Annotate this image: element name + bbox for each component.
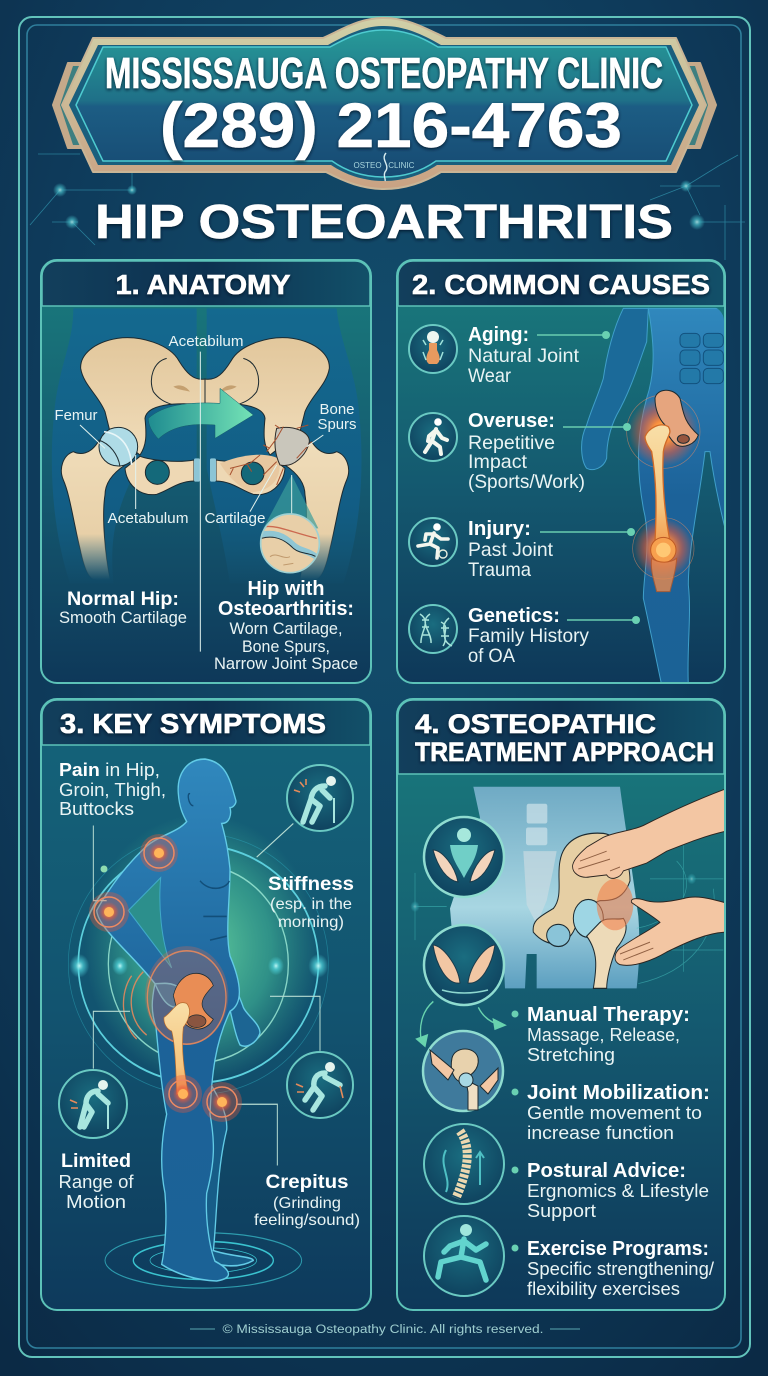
osteoarthritis hip caption: Hip with	[248, 578, 324, 600]
cause: aging	[409, 324, 610, 387]
hip glow	[123, 946, 228, 1094]
cause: overuse	[409, 410, 631, 493]
anatomy labels: Spurs	[318, 416, 356, 433]
concentric rings and glow	[68, 814, 328, 1094]
icon: spine posture	[424, 1124, 504, 1204]
symptom: crepitus: Crepitus	[266, 1172, 348, 1193]
icon: limited motion, person with cane	[59, 1070, 127, 1138]
genetics leader	[567, 616, 640, 624]
background network nodes	[30, 154, 745, 260]
symptoms header bar	[42, 700, 370, 745]
anatomy labels: Acetabilum	[168, 333, 244, 350]
title: HIP OSTEOARTHRITIS	[95, 196, 673, 249]
banner	[53, 18, 716, 189]
treatment: postural advice: Ergnomics & Lifestyle	[527, 1181, 709, 1201]
icon: walking person	[409, 413, 457, 461]
osteoarthritis hip caption: Bone Spurs,	[242, 637, 330, 656]
icon: stiffness, stooped person	[287, 765, 353, 831]
lower hand	[615, 897, 725, 965]
icon: hands on body	[424, 817, 504, 897]
osteoarthritis hip caption: Narrow Joint Space	[214, 654, 358, 673]
cause: genetics: Family History	[468, 625, 589, 647]
symptom: crepitus: (Grinding	[273, 1195, 341, 1212]
symptom: pain: Buttocks	[59, 799, 134, 819]
symptom: stiffness: (esp. in the	[270, 896, 352, 913]
body illustration	[68, 759, 328, 1288]
treatment heading: 4. OSTEOPATHIC	[415, 709, 656, 739]
treatment header bar	[398, 700, 724, 774]
cause: overuse: Overuse:	[468, 410, 555, 432]
normal hip caption: Smooth Cartilage	[59, 608, 187, 627]
treatment heading	[415, 709, 714, 767]
symptom: limited range of motion: Limited	[61, 1151, 131, 1172]
anatomy header bar	[42, 261, 370, 306]
aging leader	[537, 331, 610, 339]
icon: two hands	[424, 925, 504, 1005]
treatment: manual therapy: Massage, Release,	[527, 1025, 680, 1045]
human figure	[97, 759, 260, 1281]
symptom: crepitus	[254, 1172, 360, 1229]
treatment: exercise programs: flexibility exercises	[527, 1279, 680, 1299]
banner small logo	[354, 153, 415, 181]
cause: injury: Past Joint	[468, 539, 554, 561]
treatment: joint mobilization: increase function	[527, 1123, 674, 1143]
anatomy labels: Acetabulum	[108, 510, 188, 527]
treatment: joint mobilization	[512, 1082, 710, 1143]
treatment: joint mobilization: Joint Mobilization:	[527, 1082, 710, 1104]
leader lines	[80, 352, 323, 652]
spine	[523, 804, 557, 924]
icon: exercise	[424, 1216, 504, 1296]
leader lines	[93, 824, 320, 1166]
symptom: pain: Pain in Hip,	[59, 760, 160, 780]
panel: anatomy	[41, 260, 371, 683]
joint glows	[89, 834, 242, 1122]
manual therapy illustration	[410, 787, 725, 1046]
treatment heading: TREATMENT APPROACH	[415, 737, 714, 767]
osteoarthritis hip caption: Osteoarthritis:	[218, 598, 354, 620]
normal hip caption: Normal Hip:	[67, 589, 179, 610]
cause: overuse: Impact	[468, 451, 528, 473]
symptom: stiffness	[268, 874, 354, 931]
treatment: manual therapy: Stretching	[527, 1045, 615, 1065]
cause: aging: Wear	[468, 365, 511, 387]
upper hand	[573, 789, 725, 878]
treatment: joint mobilization: Gentle movement to	[527, 1103, 702, 1123]
panel: key symptoms	[41, 699, 371, 1310]
cause: injury: Trauma	[468, 559, 531, 581]
gap between arm and torso	[128, 878, 172, 968]
symptoms heading: 3. KEY SYMPTOMS	[60, 708, 326, 739]
magnified cartilage inset	[260, 475, 320, 573]
causes header bar	[398, 261, 724, 306]
symptom: stiffness: morning)	[278, 914, 344, 931]
symptom: crepitus: feeling/sound)	[254, 1212, 360, 1229]
anatomy labels	[54, 333, 356, 527]
arrow	[148, 388, 253, 439]
symptom: stiffness: Stiffness	[268, 874, 354, 895]
anatomy heading: 1. ANATOMY	[116, 269, 291, 300]
floor rings	[105, 1233, 302, 1288]
symptom: limited range of motion	[58, 1151, 135, 1212]
treatment: postural advice: Postural Advice:	[527, 1160, 686, 1182]
overuse leader	[563, 423, 631, 431]
pelvis and femur	[533, 833, 630, 988]
anatomy labels: Femur	[54, 407, 98, 424]
treatment: exercise programs	[512, 1238, 714, 1299]
normal femoral head	[98, 427, 138, 467]
cause: genetics: of OA	[468, 645, 515, 667]
grid accents	[410, 845, 723, 984]
cause: genetics	[409, 605, 640, 667]
leg anatomy illustration	[582, 308, 728, 685]
banner frame	[53, 18, 716, 189]
treatment: postural advice	[512, 1160, 709, 1221]
body background	[450, 787, 639, 988]
cause: aging: Aging:	[468, 324, 529, 346]
treatment: exercise programs: Specific strengthening/	[527, 1259, 714, 1279]
osteoarthritis hip caption: Worn Cartilage,	[230, 619, 342, 638]
osteoarthritis hip caption	[214, 578, 358, 673]
hip illustration	[52, 308, 361, 652]
treatment: manual therapy: Manual Therapy:	[527, 1004, 690, 1026]
cause: overuse: (Sports/Work)	[468, 471, 585, 493]
anatomy labels: Bone	[320, 401, 354, 418]
symptom: limited range of motion: Motion	[66, 1192, 126, 1212]
panel: common causes	[397, 260, 728, 685]
footer: © Mississauga Osteopathy Clinic. All rights reserved.	[222, 1324, 544, 1336]
icon: crepitus, limping person	[287, 1052, 353, 1118]
symptom: pain: Groin, Thigh,	[59, 780, 166, 800]
cause: aging: Natural Joint	[468, 345, 580, 367]
symptom: limited range of motion: Range of	[58, 1172, 135, 1192]
cause: injury	[409, 518, 635, 581]
icon: aging joint	[409, 325, 457, 373]
treatment: postural advice: Support	[527, 1201, 596, 1221]
normal hip caption	[59, 589, 187, 627]
banner small logo: OSTEO CLINIC	[354, 161, 415, 170]
panel: osteopathic treatment approach	[397, 699, 725, 1310]
anatomy labels: Cartilage	[204, 510, 266, 527]
cause: overuse: Repetitive	[468, 432, 555, 454]
banner phone number: (289) 216-4763	[160, 91, 622, 161]
cause: injury: Injury:	[468, 518, 531, 540]
curved arrows	[417, 1001, 505, 1046]
causes heading: 2. COMMON CAUSES	[412, 269, 710, 300]
icon: running person	[409, 518, 457, 566]
symptom: pain	[59, 760, 166, 819]
icon: joint mobilization	[423, 1031, 503, 1111]
treatment: manual therapy	[512, 1004, 690, 1065]
cause: genetics: Genetics:	[468, 605, 560, 627]
icon: DNA	[409, 605, 457, 653]
injury leader	[540, 528, 635, 536]
damaged joint and bone spurs	[220, 425, 312, 492]
treatment: exercise programs: Exercise Programs:	[527, 1238, 709, 1260]
